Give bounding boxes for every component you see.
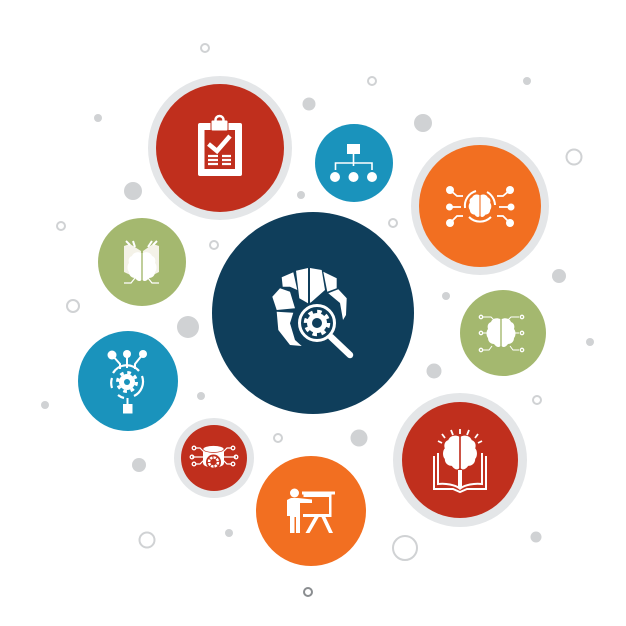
panel: green book brain bubble: [98, 218, 186, 306]
panel: small red database bubble: [174, 418, 254, 498]
decorative dots: [41, 44, 594, 596]
icon: clipboard checklist: [198, 116, 242, 176]
panel: orange presenter bubble: [256, 456, 366, 566]
icon: brain with magnifying glass: [272, 268, 350, 355]
panel: clipboard bubble: [148, 76, 292, 220]
icon: database with gear and circuits: [190, 446, 238, 470]
icon: presenter with board: [287, 488, 335, 533]
icon: book with brain: [124, 241, 159, 283]
panel: orange brain network bubble: [411, 137, 549, 275]
panel: blue gear process bubble: [78, 331, 178, 431]
panel: green brain circuit bubble: [460, 290, 546, 376]
icon: hierarchy chart: [330, 144, 377, 182]
icon: brain with circuits: [479, 315, 524, 352]
icon: brain with cycle and nodes: [446, 186, 514, 227]
icon: brain over open book: [434, 429, 486, 492]
panel: hierarchy bubble: [315, 124, 393, 202]
panel: red open book brain bubble: [393, 393, 527, 527]
icon: gear cycle with nodes: [108, 350, 147, 414]
panel: central bubble with brain and magnifier: [212, 212, 414, 414]
